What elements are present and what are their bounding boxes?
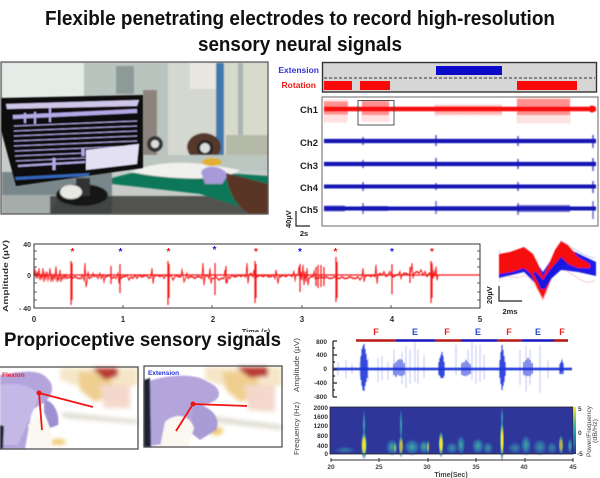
time axis <box>331 458 573 462</box>
blue band <box>499 247 596 292</box>
extension bar <box>436 66 502 75</box>
y tick labels: 2000 <box>314 405 328 412</box>
scale bar: channel traces <box>284 210 310 238</box>
spectrogram: (dB/Hz) <box>592 419 599 443</box>
y axis <box>333 341 337 397</box>
selection box <box>358 100 394 125</box>
x axis title: Time (s) <box>242 327 271 336</box>
spike waveform overlay: 2ms <box>502 307 518 316</box>
y tick labels: 1200 <box>314 423 328 430</box>
event stars: * <box>390 247 394 258</box>
red band <box>499 241 590 299</box>
x axis labels: 3 <box>300 315 305 324</box>
channel labels: Ch3 <box>300 161 318 172</box>
x axis labels: 1 <box>121 315 126 324</box>
title: Flexible penetrating electrodes to record high-resolution <box>45 7 555 30</box>
colour bar labels <box>577 406 583 458</box>
channel labels: Ch4 <box>300 183 319 194</box>
time tick labels: 35 <box>472 464 480 471</box>
y tick labels: -800 <box>314 394 327 401</box>
channel 2 trace <box>324 135 596 148</box>
event stars: * <box>213 245 217 256</box>
colour bar title: Power/Frequency <box>586 405 593 457</box>
spectrogram <box>294 402 599 478</box>
heading: proprioceptive sensory signals: Proprioceptive sensory signals <box>4 330 281 351</box>
channel 4 trace <box>324 181 596 193</box>
event stars: * <box>71 247 75 258</box>
channel 5 trace <box>324 201 596 219</box>
scale bar <box>499 286 522 301</box>
y axis title: Amplitude (µV) <box>294 338 301 392</box>
x axis labels: 2 <box>211 315 216 324</box>
event stars <box>71 245 434 258</box>
time tick labels: 25 <box>375 464 383 471</box>
amplitude trace <box>333 342 572 393</box>
event stars: * <box>430 247 434 258</box>
channel labels: Ch2 <box>300 138 318 149</box>
title: sensory neural signals <box>198 33 402 56</box>
flexion extension phase bar: F <box>444 327 450 337</box>
y axis labels: 40 <box>23 242 31 249</box>
scale bar: channel traces: 40µV <box>284 210 293 228</box>
spike waveform overlay <box>485 241 596 316</box>
y tick labels: 0 <box>323 366 327 373</box>
colour bar labels: 5 <box>578 406 582 413</box>
extension label: Extension <box>148 370 179 377</box>
joint angle lines <box>39 393 93 430</box>
flexion extension phase bar: E <box>412 327 418 337</box>
y tick labels: 400 <box>317 443 328 450</box>
y tick labels: 800 <box>317 433 328 440</box>
channel 3 trace <box>324 158 596 171</box>
channel labels: Ch1 <box>300 105 319 116</box>
y axis title: Amplitude (µV) <box>1 239 10 312</box>
y axis title: Frequency (Hz) <box>294 402 301 455</box>
title <box>45 7 555 56</box>
spike waveform overlay: 20µV <box>485 286 494 304</box>
label: rotation: Rotation <box>282 80 316 90</box>
y axis labels: 0 <box>27 273 31 280</box>
y tick labels: 0 <box>324 451 328 458</box>
channel 1 trace <box>324 106 596 112</box>
time tick labels: 20 <box>327 464 335 471</box>
axes frame <box>34 244 480 308</box>
panel: channel traces <box>322 97 598 226</box>
flexion extension phase bar: F <box>506 327 512 337</box>
flexion extension phase bar: E <box>535 327 541 337</box>
event stars: * <box>298 247 302 258</box>
x axis labels: 4 <box>390 315 395 324</box>
flexion extension phase bar <box>356 327 568 340</box>
y tick labels: -400 <box>314 380 327 387</box>
blue core <box>533 257 568 289</box>
colour bar <box>573 407 576 454</box>
colour bar labels: 0 <box>578 430 582 437</box>
event stars: * <box>167 247 171 258</box>
waveform <box>34 257 480 305</box>
time tick labels: 45 <box>569 464 577 471</box>
event stars: * <box>119 247 123 258</box>
channel labels <box>300 105 319 216</box>
amplitude chart <box>294 338 572 401</box>
y tick labels: 400 <box>316 352 327 359</box>
event stars: * <box>254 247 258 258</box>
flexion extension phase bar: F <box>559 327 565 337</box>
flexion extension phase bar: F <box>373 327 379 337</box>
rotation bars <box>324 81 577 90</box>
y tick labels: 800 <box>316 339 327 346</box>
label: extension: Extension <box>278 65 319 75</box>
y axis labels <box>19 242 31 313</box>
colour bar labels: -5 <box>577 451 583 458</box>
time tick labels: 30 <box>423 464 431 471</box>
photo: flexion <box>0 367 138 449</box>
x axis labels: 0 <box>32 315 37 324</box>
spike train chart <box>1 239 483 336</box>
channel labels: Ch5 <box>300 205 319 216</box>
panel: movement timing <box>278 62 596 92</box>
x axis labels: 5 <box>478 315 483 324</box>
photo: extension <box>144 366 282 447</box>
y tick labels <box>314 405 328 458</box>
flexion extension phase bar: E <box>475 327 481 337</box>
photo: recording setup <box>1 62 268 214</box>
flexion label: Flexion <box>2 372 25 379</box>
x axis labels <box>32 315 483 324</box>
scale bar: channel traces: 2s <box>300 229 308 238</box>
monitor <box>1 95 143 186</box>
y axis labels: - 40 <box>19 306 31 313</box>
event stars: * <box>334 247 338 258</box>
time tick labels <box>327 464 577 471</box>
time tick labels: 40 <box>520 464 528 471</box>
y tick labels: 1600 <box>314 414 328 421</box>
y tick labels <box>314 339 327 401</box>
joint angle lines <box>176 404 247 431</box>
